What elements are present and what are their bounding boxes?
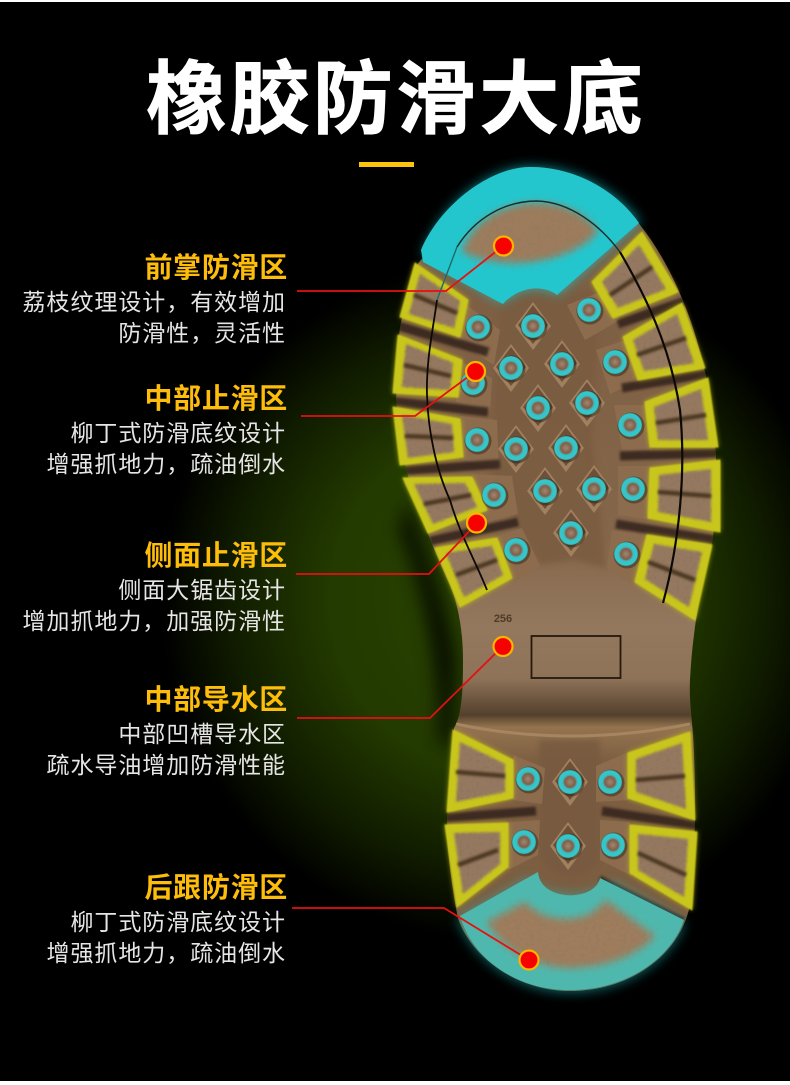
tread blocks <box>455 290 652 876</box>
dark gaps between tread blocks <box>390 296 722 920</box>
sole illustration <box>180 158 790 1000</box>
title: 橡胶防滑大底 <box>146 55 646 144</box>
toe cap: cyan zone <box>421 167 639 304</box>
label: mid zone: 中部止滑区 <box>144 383 288 414</box>
label: heel zone: 增强抓地力，疏油倒水 <box>46 940 286 966</box>
title accent bar <box>359 162 414 167</box>
label: forefoot zone <box>23 252 288 346</box>
label: mid zone <box>46 383 288 477</box>
label: mid zone: 增强抓地力，疏油倒水 <box>46 451 286 477</box>
yellow lug glow <box>393 232 720 910</box>
label: side zone: 侧面止滑区 <box>144 540 288 571</box>
midfoot size mark: 256 <box>494 613 512 625</box>
label: side zone <box>23 540 288 634</box>
callout lines <box>292 246 529 960</box>
heel cap: textured brown centre <box>487 900 655 968</box>
label: drainage zone <box>46 684 288 778</box>
welt stitch lines <box>427 201 682 603</box>
textured lug centres <box>402 245 711 897</box>
label: heel zone: 后跟防滑区 <box>144 872 288 903</box>
label: forefoot zone: 防滑性，灵活性 <box>118 320 286 346</box>
heel cap: teal zone <box>460 872 684 990</box>
yellow lug bands <box>393 232 720 910</box>
sole body <box>396 167 717 991</box>
label: side zone: 增加抓地力，加强防滑性 <box>23 608 286 634</box>
top white edge <box>0 0 790 2</box>
central diamonds <box>493 302 612 870</box>
teal studs <box>460 298 648 860</box>
label: drainage zone: 疏水导油增加防滑性能 <box>46 752 286 778</box>
toe cap glow <box>423 167 640 303</box>
label: mid zone: 柳丁式防滑底纹设计 <box>70 420 286 446</box>
callout dots <box>466 236 538 970</box>
label: side zone: 侧面大锯齿设计 <box>118 577 286 603</box>
label: drainage zone: 中部凹槽导水区 <box>118 721 286 747</box>
label: forefoot zone: 荔枝纹理设计，有效增加 <box>23 289 286 315</box>
toe cap: textured brown centre <box>462 203 598 263</box>
bottom white edge <box>0 1081 790 1085</box>
label: heel zone: 柳丁式防滑底纹设计 <box>70 909 286 935</box>
label: forefoot zone: 前掌防滑区 <box>144 252 288 283</box>
label: drainage zone: 中部导水区 <box>144 684 288 715</box>
label: heel zone <box>46 872 288 966</box>
heel cap glow <box>458 878 684 992</box>
midfoot rectangle <box>532 636 620 678</box>
lug centre grooves <box>404 267 711 875</box>
